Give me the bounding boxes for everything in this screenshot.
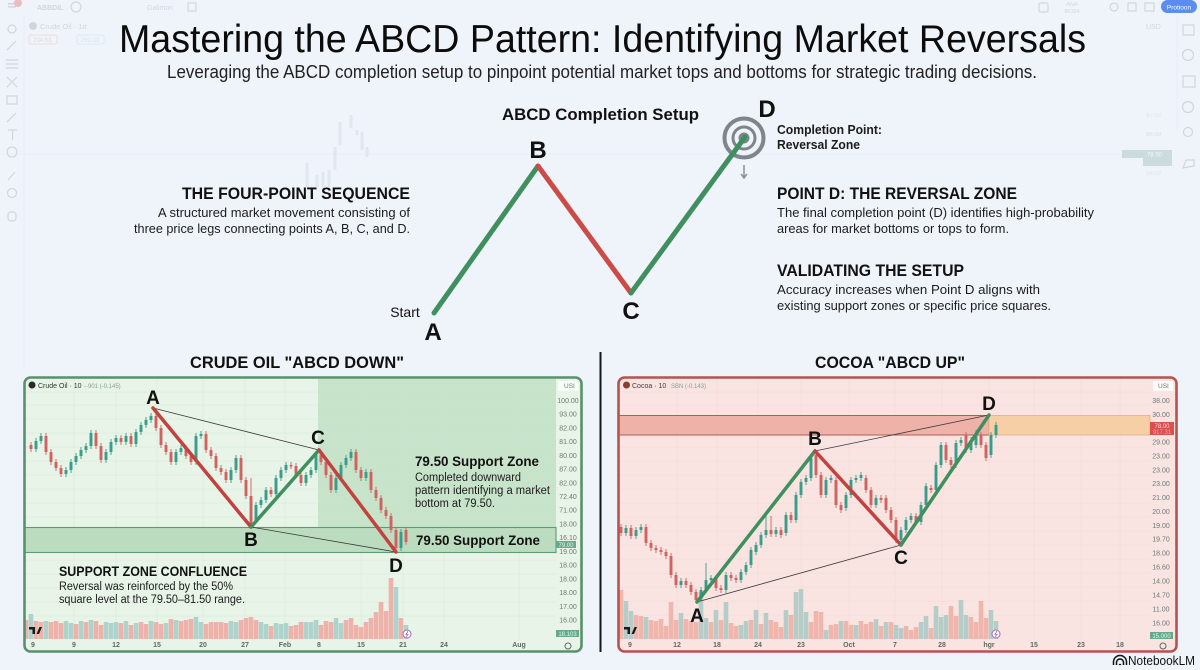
annotation: support zone confluence: SUPPORT ZONE CONFLUENCE — [59, 563, 247, 579]
date axis: 23 — [797, 642, 805, 649]
price axis: 81.00 — [559, 439, 577, 446]
annotation: support zone confluence — [59, 563, 247, 606]
chart symbol label: Crude Oil · 10 — [38, 383, 82, 390]
price axis: 16.00 — [559, 618, 577, 624]
chart symbol label — [623, 382, 706, 390]
support zone band — [25, 528, 556, 552]
price axis: 93.00 — [559, 412, 577, 418]
text block: four-point sequence: A structured market movement consisting of — [158, 205, 410, 220]
date axis: 12 — [673, 642, 681, 649]
text block: validating the setup: Accuracy increases when Point D aligns with — [777, 282, 1040, 297]
resistance zone band — [619, 416, 989, 435]
price axis: 18.103 — [558, 632, 577, 638]
date axis: 24 — [754, 642, 762, 649]
price axis: 82.00 — [559, 480, 577, 488]
date axis: 8 — [317, 642, 321, 649]
callout: completion point — [777, 122, 882, 152]
diagram: ABCD zigzag: B — [529, 137, 547, 164]
diagram heading: ABCD Completion Setup — [502, 105, 699, 124]
date axis: 21 — [399, 642, 407, 649]
price axis: 18.00 — [559, 562, 577, 570]
panel frame — [24, 378, 582, 652]
price axis: 72.40 — [559, 494, 577, 501]
date axis: 9 — [628, 642, 632, 649]
logo: NotebookLM: NotebookLM — [1128, 653, 1195, 668]
date axis: 28 — [938, 642, 946, 649]
faded trading platform backdrop: 66.00 — [1146, 132, 1162, 138]
faded trading platform backdrop: 47.00 — [1146, 113, 1162, 119]
price axis: 87.00 — [559, 466, 577, 474]
date axis: 9 — [72, 642, 76, 649]
price axis: 23.00 — [1152, 468, 1170, 474]
date axis: 12 — [112, 642, 120, 649]
point labels: B — [244, 530, 258, 551]
price axis: 917.31 — [1153, 430, 1172, 436]
button: upgrade: Protioon — [1167, 4, 1191, 12]
diagram: ABCD zigzag: C — [622, 298, 640, 325]
thin trend lines — [153, 408, 396, 552]
date axis: Feb — [279, 642, 291, 649]
price axis: 71.00 — [559, 508, 577, 514]
price axis: 18.00 — [559, 590, 577, 597]
price axis: 23.00 — [1152, 454, 1170, 460]
faded trading platform backdrop: Crude Oil · 1d — [40, 22, 87, 31]
date axis: 23 — [1077, 642, 1085, 649]
price axis: 18.00 — [559, 522, 577, 528]
point labels — [146, 388, 403, 577]
date axis: 7 — [893, 642, 897, 649]
candles — [621, 422, 996, 603]
chart symbol label: SBN (-0.143) — [671, 384, 706, 390]
faded trading platform backdrop: ABBDIL — [37, 5, 64, 12]
volume bars — [26, 578, 406, 639]
faded trading platform backdrop: USD — [1146, 24, 1161, 31]
icon: tradingview mark — [29, 627, 42, 634]
price axis: USI — [564, 383, 575, 390]
point labels: C — [311, 428, 325, 449]
panel: cocoa chart — [618, 378, 1176, 652]
price axis: 79.00 — [558, 543, 574, 549]
date axis: hgr — [983, 642, 995, 649]
date axis: 24 — [440, 642, 448, 649]
date axis — [628, 642, 1166, 649]
heading: cocoa: COCOA "ABCD UP" — [815, 353, 965, 372]
point labels: A — [146, 388, 160, 409]
date axis — [31, 642, 571, 649]
annotation: support zone confluence: square level at the 79.50–81.50 range. — [59, 594, 245, 606]
date axis: 9 — [31, 642, 35, 649]
point labels: C — [894, 548, 908, 569]
date axis: 15 — [153, 642, 161, 649]
text block: point D — [777, 184, 1094, 236]
annotation: support zone description: 79.50 Support Zone — [415, 453, 539, 469]
text block: point D: The final completion point (D) identifies high-probability — [777, 205, 1094, 220]
icon: lightning badge — [403, 630, 411, 638]
faded trading platform backdrop: 58.00 — [1146, 171, 1162, 177]
date axis: 18 — [1116, 642, 1124, 649]
date axis: 15 — [357, 642, 365, 649]
text block: four-point sequence — [134, 184, 410, 236]
price axis: 14.00 — [1152, 578, 1170, 586]
panel frame — [618, 378, 1176, 652]
price axis — [1150, 381, 1174, 640]
point labels: D — [982, 394, 996, 415]
price axis: 38.00 — [1152, 398, 1170, 405]
candles — [31, 413, 406, 551]
text block: point D: areas for market bottoms or tops to form. — [777, 221, 1009, 236]
text block: point D: POINT D: THE REVERSAL ZONE — [777, 184, 1017, 203]
panel: crude oil chart — [24, 378, 582, 652]
price axis: 30.00 — [1152, 412, 1170, 419]
price axis: 11.00 — [1152, 606, 1170, 614]
text block: four-point sequence: THE FOUR-POINT SEQUENCE — [182, 184, 410, 203]
date axis: 27 — [241, 642, 249, 649]
chart symbol label: Cocoa · 10 — [632, 383, 666, 390]
icon: target at point D — [724, 118, 764, 158]
callout: completion point: Completion Point: — [777, 122, 882, 137]
subtitle: Leveraging the ABCD completion setup to pinpoint potential market tops and bottoms for strategic trading decisions. — [167, 62, 1037, 82]
faded trading platform backdrop: 78.50 — [1147, 152, 1163, 158]
text block: validating the setup: VALIDATING THE SETUP — [777, 261, 964, 280]
shaded zone: right column — [318, 379, 556, 527]
price axis: 82.00 — [559, 426, 577, 432]
price axis: 15.000 — [1152, 634, 1171, 640]
date axis: Oct — [843, 642, 856, 649]
faded trading platform backdrop: 86394 — [1064, 9, 1080, 15]
text block: four-point sequence: three price legs connecting points A, B, C, and D. — [134, 221, 410, 236]
thin trend lines — [697, 415, 989, 602]
faded trading platform backdrop: 261.03 — [81, 38, 100, 44]
text block: validating the setup: existing support zones or specific price squares. — [777, 298, 1051, 313]
price axis: 20.00 — [1152, 509, 1170, 516]
button: upgrade — [1161, 0, 1197, 13]
text block: validating the setup — [777, 261, 1051, 313]
date axis: 15 — [1030, 642, 1038, 649]
date axis: 20 — [199, 642, 207, 649]
price axis: 21.00 — [1152, 495, 1170, 502]
diagram: ABCD zigzag — [390, 96, 776, 346]
price axis: 18.00 — [559, 576, 577, 584]
chart symbol label: -·901 (-0.145) — [84, 384, 121, 390]
point labels: D — [389, 556, 403, 577]
volume bars — [621, 589, 996, 639]
ABCD legs — [153, 408, 396, 552]
price axis: 16.10 — [559, 535, 577, 542]
title: Mastering the ABCD Pattern: Identifying Market Reversals — [119, 18, 1086, 61]
icon: small down arrow — [741, 165, 747, 178]
point labels: A — [690, 606, 704, 627]
diagram: ABCD zigzag: A — [424, 319, 442, 346]
heading: crude oil: CRUDE OIL "ABCD DOWN" — [190, 353, 404, 372]
price axis: 100.00 — [557, 398, 579, 405]
diagram: ABCD zigzag: D — [758, 96, 776, 123]
price axis: 19.70 — [1152, 536, 1170, 544]
annotation: zone label: 79.50 Support Zone — [416, 532, 540, 548]
price axis: 29.00 — [1152, 440, 1170, 446]
date axis: 18 — [713, 642, 721, 649]
annotation: support zone description: bottom at 79.50. — [415, 498, 495, 510]
price axis: 78.00 — [1154, 424, 1170, 430]
projected orange zone — [989, 416, 1150, 435]
price axis: 80.00 — [559, 453, 577, 460]
icon: tradingview mark — [624, 627, 637, 634]
price axis: 18.00 — [1152, 550, 1170, 558]
price axis — [556, 381, 579, 638]
faded trading platform backdrop: ANA — [1066, 2, 1078, 8]
faded trading platform backdrop: Galimon — [147, 5, 173, 12]
callout: completion point: Reversal Zone — [777, 137, 860, 152]
icon: lightning badge — [992, 630, 1000, 638]
price axis: 14.70 — [1152, 592, 1170, 600]
point labels: B — [808, 429, 822, 450]
annotation: support zone description — [415, 453, 551, 510]
annotation: support zone description: Completed downward — [415, 472, 521, 484]
faded trading platform backdrop: 204.63 — [33, 38, 52, 44]
price axis: 23.00 — [1152, 481, 1170, 488]
annotation: support zone description: pattern identifying a market — [415, 485, 551, 497]
chart symbol label — [28, 382, 121, 390]
price axis: 19.00 — [1152, 523, 1170, 530]
price axis: 17.00 — [559, 604, 577, 611]
price axis: 19.00 — [559, 549, 577, 556]
price axis: 16.60 — [1152, 564, 1170, 572]
faded trading platform backdrop — [0, 0, 1195, 370]
point labels — [690, 394, 996, 627]
diagram: ABCD zigzag: Start — [390, 304, 420, 320]
date axis: Aug — [512, 642, 526, 649]
annotation: support zone confluence: Reversal was reinforced by the 50% — [59, 581, 233, 593]
price axis: 16.00 — [1152, 620, 1170, 628]
price axis: USI — [1158, 383, 1169, 390]
ABCD legs — [697, 415, 989, 602]
